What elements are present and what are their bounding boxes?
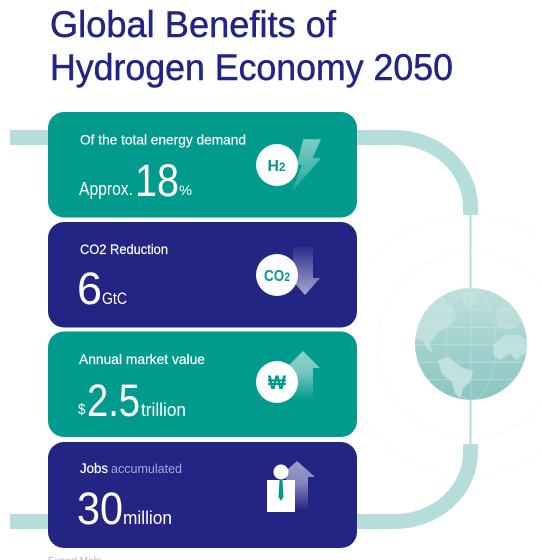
value: 2.5 trillion dollars: trillion: [141, 400, 186, 420]
panel: market value: [48, 332, 357, 437]
value: 2.5 trillion dollars: [78, 375, 186, 426]
continents: [415, 292, 528, 398]
value: 6 GtC: 6: [77, 263, 102, 314]
value: 18 percent: [79, 155, 192, 206]
icon: person with up arrow: [267, 461, 315, 512]
icon: won up arrow: ₩: [268, 373, 286, 394]
value: 18 percent: 18: [135, 155, 179, 206]
label: energy demand: Of the total energy demand: [80, 132, 246, 148]
panel: energy demand: [48, 112, 357, 218]
connector: band from top left and bottom left around to the globe: [10, 138, 470, 522]
dotted orbit rings: [340, 215, 542, 475]
value: 18 percent: Approx.: [79, 179, 133, 199]
title: Hydrogen Economy 2050: [50, 47, 453, 88]
value: 30 million: [77, 483, 172, 534]
value: 30 million: million: [123, 508, 172, 528]
graticule: [415, 288, 527, 400]
icon: hydrogen bolt: H2: [268, 158, 286, 175]
value: 2.5 trillion dollars: 2.5: [87, 375, 140, 426]
label: jobs accumulated: Jobs: [80, 460, 108, 476]
value: 30 million: 30: [77, 483, 123, 534]
panel: CO2 reduction: [48, 222, 357, 328]
icon: hydrogen bolt: [256, 139, 321, 192]
icon: CO2 down arrow: [256, 247, 320, 296]
value: 6 GtC: GtC: [102, 289, 127, 308]
value: 18 percent: %: [179, 182, 192, 198]
label: jobs accumulated: accumulated: [111, 461, 182, 476]
title: [50, 4, 453, 88]
value: 6 GtC: [77, 263, 127, 314]
globe: [415, 288, 528, 400]
icon: CO2 down arrow: CO2: [264, 268, 290, 285]
label: CO2 reduction: CO2 Reduction: [80, 241, 168, 257]
title: Global Benefits of: [50, 4, 337, 45]
icon: won up arrow: [256, 351, 320, 403]
label: jobs accumulated: [80, 460, 182, 476]
value: 2.5 trillion dollars: $: [78, 401, 86, 418]
panel: jobs: [48, 442, 357, 548]
label: market value: Annual market value: [79, 351, 205, 367]
